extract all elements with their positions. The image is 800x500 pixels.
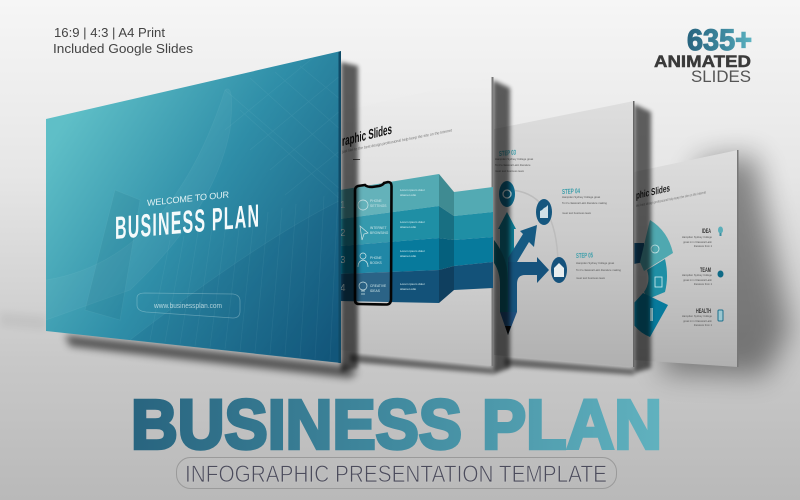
heading: step 05: STEP 05 — [576, 252, 593, 260]
band captions: Lorem ipsum dolor — [400, 282, 425, 286]
band numbers: 3 — [340, 255, 346, 266]
chart: 3D stepped band — [340, 174, 493, 303]
arc connector — [507, 190, 558, 262]
heading: step 04: To it's classical Latin literature making — [562, 201, 607, 205]
heading: step 03: To it's classical Latin literature — [495, 163, 531, 167]
cover title: BUSINESS PLAN — [115, 199, 259, 247]
heading: step 05: Hampden Sydney College great — [576, 261, 614, 265]
slide 1: cover — [46, 51, 341, 363]
badge: animated slides count — [654, 24, 752, 86]
slide 1 shadow — [0, 62, 358, 378]
phone mockup: BROWSING — [370, 231, 389, 235]
heading: step 03: meet text business team — [495, 169, 525, 173]
band captions: Lorem ipsum dolor — [400, 220, 425, 224]
slide 3 cast shadow — [634, 104, 651, 373]
badge: animated slides count: 635+ — [687, 24, 752, 57]
subtitle pill: INFOGRAPHIC PRESENTATION TEMPLATE — [185, 461, 607, 488]
labels: idea team health: literature from it — [694, 244, 712, 248]
badge: animated slides count: ANIMATED — [654, 52, 751, 71]
icon: house circle — [551, 257, 567, 283]
slide 2 subtitle: just like to the best design professional help keep the site on the Internet — [341, 128, 453, 154]
main title: PLAN — [482, 386, 662, 464]
band numbers — [340, 200, 346, 294]
phone mockup: IDEAS — [370, 289, 381, 293]
heading: step 05: meet text business team — [576, 276, 606, 280]
format note: Included Google Slides — [53, 41, 194, 56]
heading: slide 4 title: phic Slides — [636, 183, 670, 202]
heading: step 03: Hampden Sydney College great — [495, 157, 533, 161]
labels: idea team health: literature from it — [694, 282, 712, 286]
heading: step 04: Hampden Sydney College great — [562, 195, 600, 199]
labels: idea team health: IDEA — [702, 228, 711, 235]
slide 3: arrows infographic — [494, 101, 634, 375]
labels: idea team health: great in in Classical Latin — [683, 240, 713, 244]
heading: step 04 — [562, 188, 607, 215]
main title — [131, 386, 662, 464]
slide 2 cast shadow — [493, 80, 510, 374]
band captions: sitamet odio — [400, 287, 417, 291]
building texture — [46, 52, 341, 363]
heading: step 03 — [495, 150, 533, 173]
main title: BUSINESS — [131, 386, 462, 464]
labels: idea team health: Hampden Sydney College — [682, 314, 713, 318]
slide 4 subtitle: the best design professional help keep the site on the Internet — [636, 190, 706, 208]
phone mockup: PHONE — [370, 199, 383, 203]
band numbers: 2 — [340, 228, 346, 239]
format note: 16:9 | 4:3 | A4 Print — [54, 25, 165, 40]
phone mockup: CREATIVE — [370, 284, 387, 288]
badge: animated slides count: SLIDES — [691, 68, 751, 86]
url pill — [137, 293, 240, 318]
labels: idea team health: great in in Classical Latin — [683, 319, 713, 323]
heading: step 04: STEP 04 — [562, 188, 580, 196]
band captions: Lorem ipsum dolor — [400, 188, 425, 192]
format note — [53, 25, 194, 56]
phone mockup: SETTINGS — [370, 204, 387, 208]
icon: gear circle — [499, 181, 515, 207]
chart: wheel segments — [634, 220, 673, 337]
heading: step 05: To it's classical Latin literature making — [576, 268, 621, 272]
heading: step 04: meet text business team — [562, 211, 592, 215]
heading: slide 2 title: raphic Slides — [342, 122, 392, 150]
welcome text: WELCOME TO OUR — [147, 189, 229, 208]
band numbers: 4 — [340, 283, 346, 294]
phone mockup — [355, 182, 392, 304]
band captions: sitamet odio — [400, 193, 417, 197]
labels: idea team health: Hampden Sydney College — [682, 273, 713, 277]
band captions: Lorem ipsum dolor — [400, 249, 425, 253]
labels: idea team health: great in in Classical Latin — [683, 278, 713, 282]
band numbers: 1 — [340, 200, 346, 211]
labels: idea team health — [682, 228, 713, 327]
labels: idea team health: TEAM — [700, 267, 711, 274]
slide 4: wheel infographic — [634, 150, 790, 376]
labels: idea team health: literature from it — [694, 323, 712, 327]
slide 2: bands and phone — [340, 77, 494, 374]
labels: idea team health: HEALTH — [696, 308, 711, 315]
labels: idea team health: Hampden Sydney College — [682, 235, 713, 239]
arrows: pencil — [494, 212, 549, 335]
band captions: sitamet odio — [400, 225, 417, 229]
heading: step 05 — [576, 252, 621, 280]
url pill: www.businessplan.com — [153, 303, 222, 310]
icon: chart circle — [536, 199, 552, 225]
phone mockup: BOOKS — [370, 261, 383, 265]
phone mockup: INTERNET — [370, 226, 386, 230]
band captions: sitamet odio — [400, 254, 417, 258]
phone mockup: PHONE — [370, 256, 383, 260]
icons: bulb team phone — [718, 226, 724, 321]
band captions — [400, 188, 425, 291]
heading: step 03: STEP 03 — [499, 150, 516, 158]
